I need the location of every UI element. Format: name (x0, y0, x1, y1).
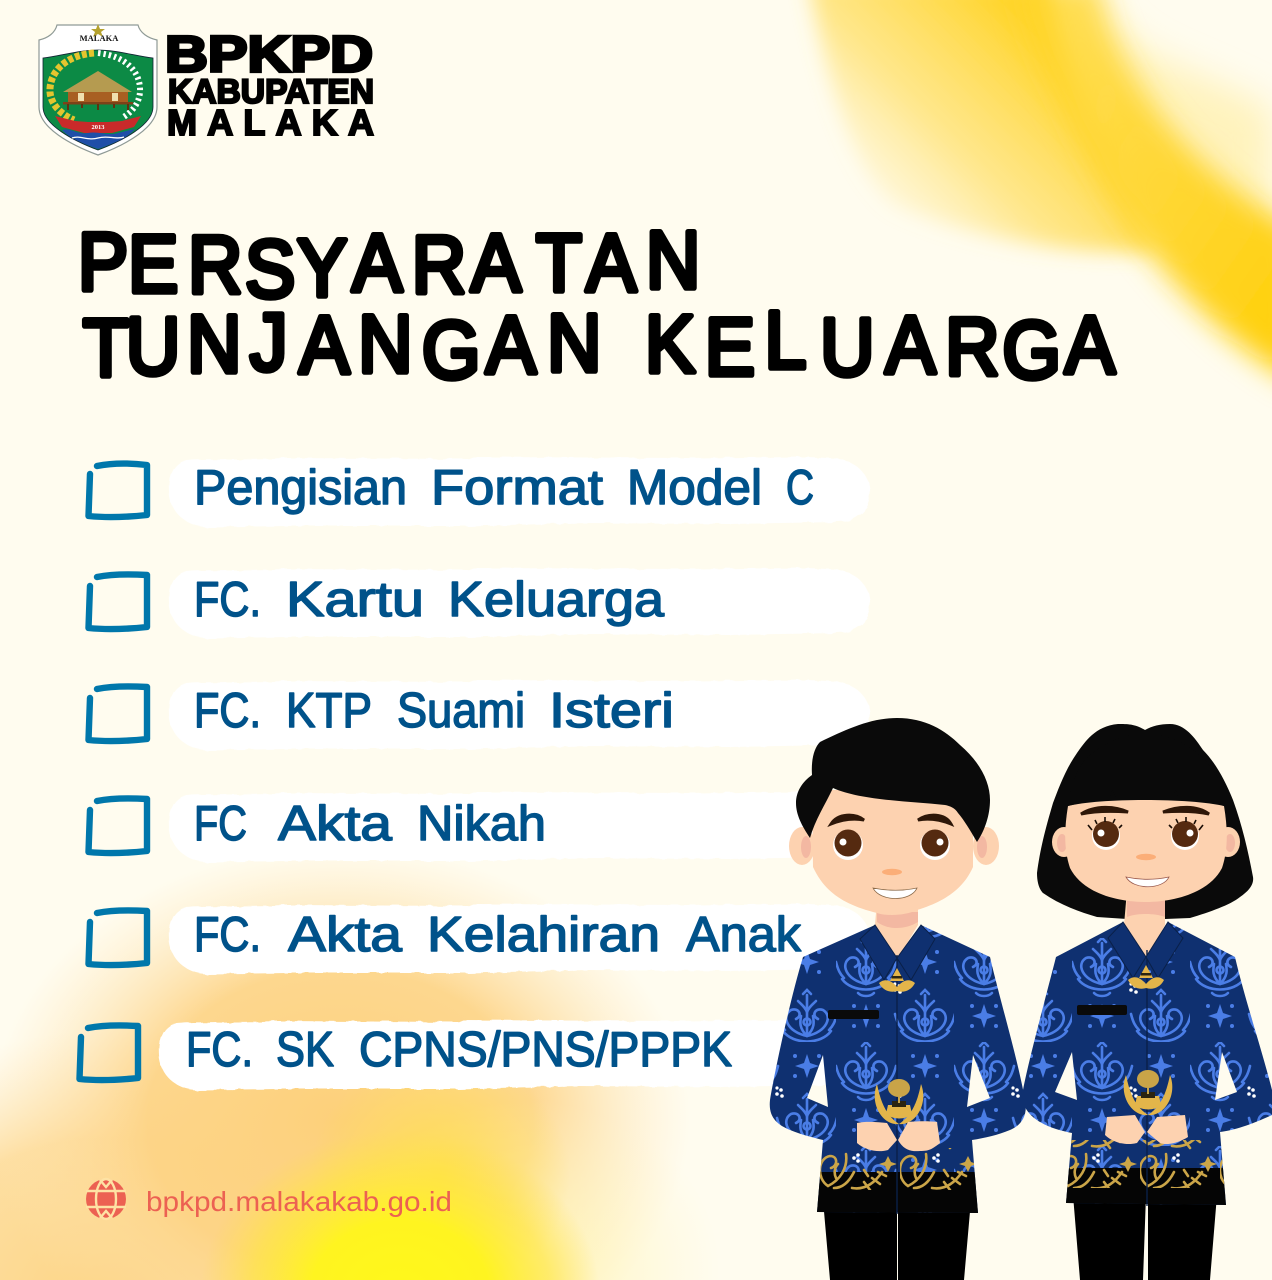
logo star (91, 24, 105, 37)
row 5 background (169, 904, 870, 974)
label 6: CPNS/PNS/PPPK (359, 1023, 732, 1077)
checkbox 5 (88, 910, 147, 965)
label 1: Format (431, 461, 603, 515)
wordmark KABUPATEN: KABUPATEN (168, 73, 374, 111)
woman emblem (1124, 1070, 1172, 1115)
label 6: FC. (186, 1023, 253, 1077)
title line one: PERSYARATAN (78, 214, 700, 315)
man emblem (875, 1079, 923, 1124)
man neck (875, 900, 918, 960)
logo name: MALAKA (80, 33, 119, 43)
footer website (86, 1179, 452, 1219)
woman civil servant (1022, 724, 1272, 1280)
logo rice wreath (50, 53, 94, 120)
man hair (796, 718, 990, 842)
row 1 background (169, 457, 870, 527)
label 3: KTP (286, 684, 372, 738)
checklist (80, 457, 870, 1090)
woman batik shirt (1022, 922, 1272, 1208)
man hands (857, 1121, 940, 1151)
checkbox 2 (88, 574, 147, 629)
man nose (882, 869, 902, 875)
label 2: Keluarga (448, 573, 665, 627)
label 3: Isteri (549, 684, 674, 738)
label 5: Anak (686, 908, 802, 962)
label 1: C (786, 461, 814, 515)
label 3 (194, 684, 674, 738)
background: top-right yellow glow (808, 0, 1272, 385)
label 6: SK (276, 1023, 334, 1077)
man collar pin (879, 968, 915, 992)
woman face (1065, 800, 1227, 902)
title line two: TUNJANGAN KELUARGA (83, 294, 1116, 396)
checkbox 3 (88, 686, 147, 741)
man face (812, 790, 973, 915)
logo cotton wreath (98, 53, 140, 118)
logo wordmark (165, 26, 374, 143)
woman collar (1108, 922, 1183, 978)
label 6 (186, 1023, 732, 1077)
woman fringe (1068, 734, 1224, 806)
label 1 (194, 461, 814, 515)
icon: globe (86, 1179, 126, 1219)
label 1: Model (627, 461, 762, 515)
woman hair back (1037, 724, 1253, 919)
man batik shirt (770, 925, 1026, 1216)
wordmark MALAKA: MALAKA (167, 102, 374, 143)
woman trousers (1073, 1195, 1217, 1280)
man civil servant (770, 718, 1026, 1280)
logo red ribbon (55, 116, 141, 133)
background: bottom-left orange and yellow glow (0, 780, 1272, 1280)
label 4: FC (194, 797, 247, 851)
man trousers (823, 1200, 971, 1280)
row 4 background (169, 792, 870, 862)
woman hands (1105, 1115, 1188, 1144)
row 6 background (159, 1020, 860, 1090)
row 3 background (169, 680, 870, 750)
checkbox 1 (88, 464, 147, 517)
man smile (873, 888, 917, 898)
website text: bpkpd.malakakab.go.id (146, 1186, 452, 1217)
label 3: Suami (397, 684, 525, 738)
row 2 background (169, 568, 870, 638)
checklist labels (186, 461, 814, 1077)
label 3: FC. (194, 684, 261, 738)
label 5: Kelahiran (427, 908, 660, 962)
label 5: FC. (194, 908, 261, 962)
man collar (860, 925, 935, 980)
label 2: FC. (194, 573, 261, 627)
man eyes (833, 830, 950, 860)
wordmark BPKPD: BPKPD (165, 26, 373, 82)
checkbox 6 (80, 1025, 138, 1080)
checkboxes (80, 464, 147, 1080)
logo: Malaka coat of arms (39, 24, 157, 155)
woman ears (1052, 827, 1240, 857)
logo waves (62, 129, 135, 149)
label 4 (194, 797, 546, 851)
woman brows (1081, 807, 1209, 814)
title (78, 214, 1116, 396)
label 2 (194, 573, 665, 627)
woman name badge (1077, 1005, 1127, 1015)
man ears (789, 827, 999, 865)
man name badge (828, 1010, 879, 1019)
label 5 (194, 908, 802, 962)
logo year: 2013 (92, 124, 105, 131)
woman nose (1136, 854, 1156, 860)
label 4: Nikah (417, 797, 546, 851)
label 5: Akta (288, 908, 403, 962)
woman eyes (1088, 817, 1203, 850)
man brows (831, 815, 951, 824)
woman neck (1124, 890, 1165, 960)
checkbox 4 (88, 798, 147, 853)
logo traditional house (63, 71, 133, 110)
label 4: Akta (278, 797, 393, 851)
woman collar pin (1128, 965, 1164, 989)
woman smile (1126, 877, 1169, 887)
label 1: Pengisian (194, 461, 407, 515)
label 2: Kartu (286, 573, 424, 627)
